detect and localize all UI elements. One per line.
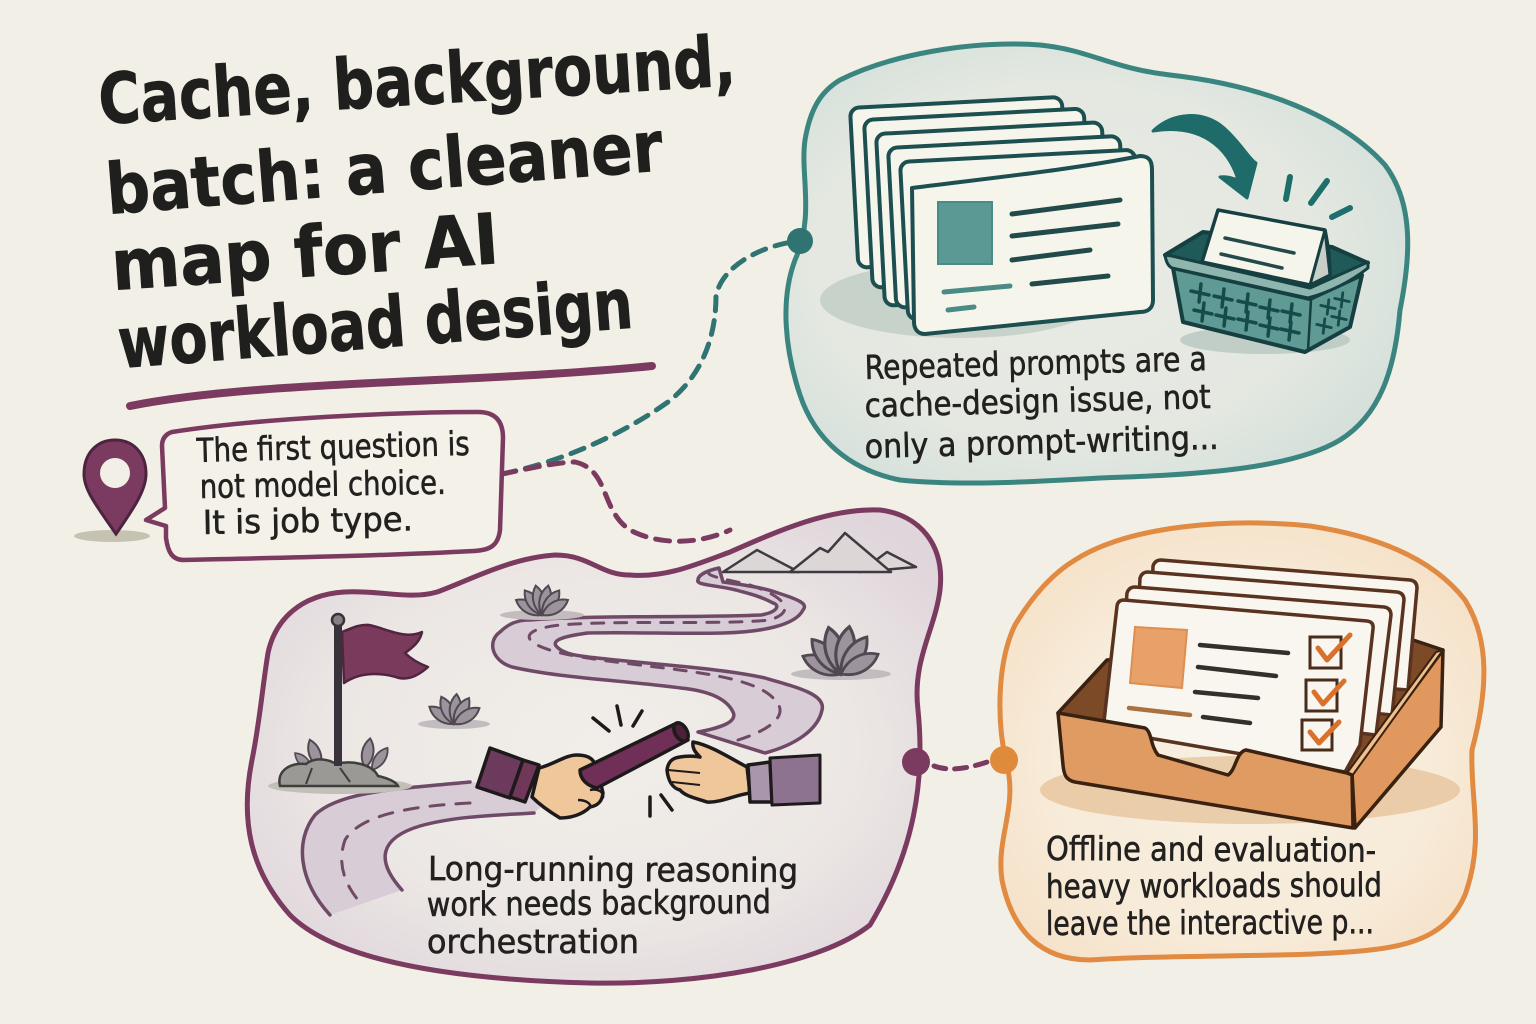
speech bubble bbox=[146, 412, 503, 560]
icon: bush top bbox=[500, 584, 584, 620]
background panel text: orchestration bbox=[427, 922, 639, 961]
title: workload design bbox=[115, 263, 636, 385]
orange thumbnail bbox=[1130, 627, 1187, 688]
icon: map pin bbox=[74, 440, 150, 542]
callout text: The first question is bbox=[195, 424, 470, 470]
connector dot: background bbox=[902, 748, 930, 776]
front face bbox=[1058, 713, 1353, 828]
icon: bush middle bbox=[418, 694, 490, 729]
right rim highlight bbox=[1347, 650, 1443, 776]
cache panel text: cache-design issue, not bbox=[864, 377, 1211, 425]
panel: background orchestration bbox=[247, 510, 941, 983]
sparks bbox=[593, 706, 672, 816]
background panel text bbox=[427, 849, 798, 961]
connector: background to batch bbox=[934, 761, 990, 769]
batch panel text: leave the interactive p... bbox=[1046, 902, 1374, 943]
arrow: card to basket bbox=[1153, 116, 1256, 198]
checkboxes bbox=[1302, 635, 1350, 750]
title bbox=[96, 20, 738, 385]
basket holes bbox=[1191, 284, 1349, 340]
motion marks bbox=[1286, 177, 1350, 217]
cache panel text: only a prompt-writing... bbox=[864, 418, 1219, 466]
connector: callout to background panel bbox=[502, 462, 730, 541]
batch panel text: Offline and evaluation- bbox=[1046, 829, 1376, 870]
basket shadow bbox=[1180, 326, 1350, 354]
road: upper winding section bbox=[493, 568, 822, 753]
icon: basket bbox=[1165, 210, 1368, 352]
callout text bbox=[195, 424, 470, 542]
card in basket bbox=[1202, 210, 1330, 285]
title: map for AI bbox=[108, 198, 501, 307]
title underline bbox=[130, 366, 652, 406]
background panel text: work needs background bbox=[427, 882, 771, 924]
mountains bbox=[723, 533, 916, 572]
tray inner back bbox=[1058, 640, 1443, 775]
connector dot: batch bbox=[990, 746, 1018, 774]
shadow under cards bbox=[820, 262, 1100, 338]
callout text: It is job type. bbox=[202, 499, 413, 542]
batch panel text bbox=[1046, 829, 1382, 943]
panel: cache bbox=[786, 44, 1408, 483]
right hand bbox=[667, 742, 750, 802]
left hand bbox=[532, 755, 603, 818]
basket body bbox=[1173, 268, 1362, 352]
callout text: not model choice. bbox=[199, 463, 446, 506]
left sleeve bbox=[477, 748, 523, 798]
cache panel text bbox=[864, 339, 1219, 466]
icon: wooden tray bbox=[1058, 650, 1443, 828]
batch panel blob bbox=[1000, 523, 1484, 960]
callout: job type bbox=[74, 412, 503, 560]
title: batch: a cleaner bbox=[103, 105, 666, 231]
card teal lines bbox=[944, 286, 1010, 310]
card text lines bbox=[1012, 200, 1120, 284]
cache panel blob bbox=[786, 44, 1408, 483]
right face bbox=[1352, 650, 1443, 828]
sheet text lines bbox=[1195, 645, 1288, 723]
title: Cache, background, bbox=[96, 20, 738, 141]
fingers over baton bbox=[578, 789, 603, 808]
icon: flag bbox=[268, 614, 428, 794]
connector: callout to cache panel bbox=[502, 241, 798, 474]
icon: bush right bbox=[791, 625, 891, 681]
road: lower section bbox=[302, 782, 560, 915]
icon: stacked sheets bbox=[1103, 560, 1417, 772]
right sleeve bbox=[748, 762, 772, 802]
cache panel text: Repeated prompts are a bbox=[864, 339, 1207, 387]
background panel blob bbox=[247, 510, 941, 983]
icon: baton handoff bbox=[477, 706, 820, 818]
connector dot: cache bbox=[787, 228, 813, 254]
card thumbnail bbox=[938, 202, 992, 264]
tray shadow bbox=[1040, 756, 1460, 824]
icon: stacked cards bbox=[850, 97, 1153, 334]
background panel text: Long-running reasoning bbox=[428, 849, 798, 890]
basket back rim bbox=[1165, 232, 1368, 297]
baton bbox=[580, 723, 688, 788]
panel: batch bbox=[990, 523, 1484, 960]
batch panel text: heavy workloads should bbox=[1046, 865, 1382, 906]
